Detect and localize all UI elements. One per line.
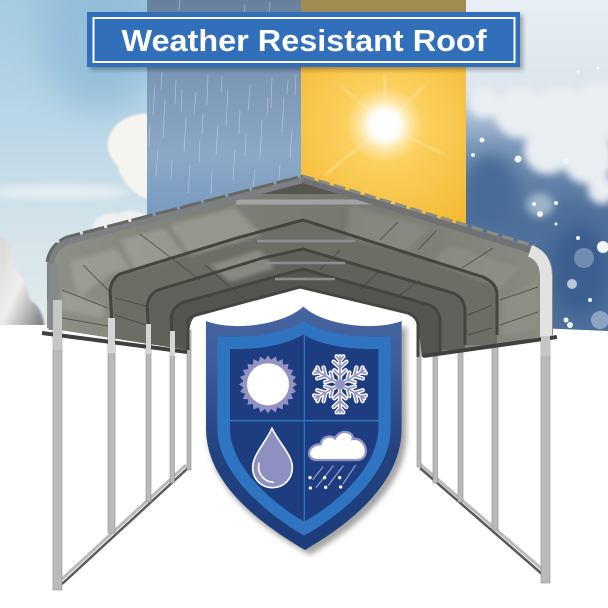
shield middle band: [217, 321, 391, 536]
icon: sun: [239, 355, 297, 413]
icon: snowflake: [313, 356, 367, 412]
shield badge: [206, 307, 407, 555]
title: Weather Resistant Roof: [122, 23, 487, 58]
rain panel: [147, 0, 301, 240]
right rail: [420, 468, 542, 574]
title banner: [87, 12, 523, 70]
roof arch frames: [110, 220, 497, 357]
right eave bar: [423, 337, 557, 356]
snow dots: [471, 66, 608, 329]
left roof edge: [50, 180, 303, 300]
icon: water drop: [253, 428, 292, 488]
inner roof bays, darker with depth: [110, 220, 497, 345]
roof underside: [47, 177, 553, 357]
carport frame posts and rails: [53, 300, 550, 590]
storm cloud at lower left: [0, 236, 44, 326]
carport roof: [42, 176, 557, 357]
left rail: [62, 468, 188, 584]
left corner post: [48, 264, 60, 330]
snow panel: [462, 0, 608, 340]
roof seams: [62, 222, 538, 335]
shield inner field: [230, 334, 378, 522]
clear sky panel: [0, 0, 147, 325]
left eave bar: [42, 333, 187, 352]
right roof edge: [303, 180, 530, 250]
sun panel: [301, 67, 466, 227]
posts: [53, 300, 550, 590]
shield outer rim: [206, 307, 402, 550]
white cloud beside rain panel: [108, 114, 150, 200]
icon: rain cloud: [308, 432, 366, 490]
ridge brace: [236, 200, 372, 204]
sun rays: [325, 75, 445, 175]
white ground: [0, 287, 608, 608]
roof panel highlights: [62, 207, 275, 318]
cross braces: [257, 241, 355, 279]
background: weather sky panels: [0, 0, 608, 340]
shield shadow: [208, 312, 407, 555]
right corner white frame: [530, 251, 546, 338]
